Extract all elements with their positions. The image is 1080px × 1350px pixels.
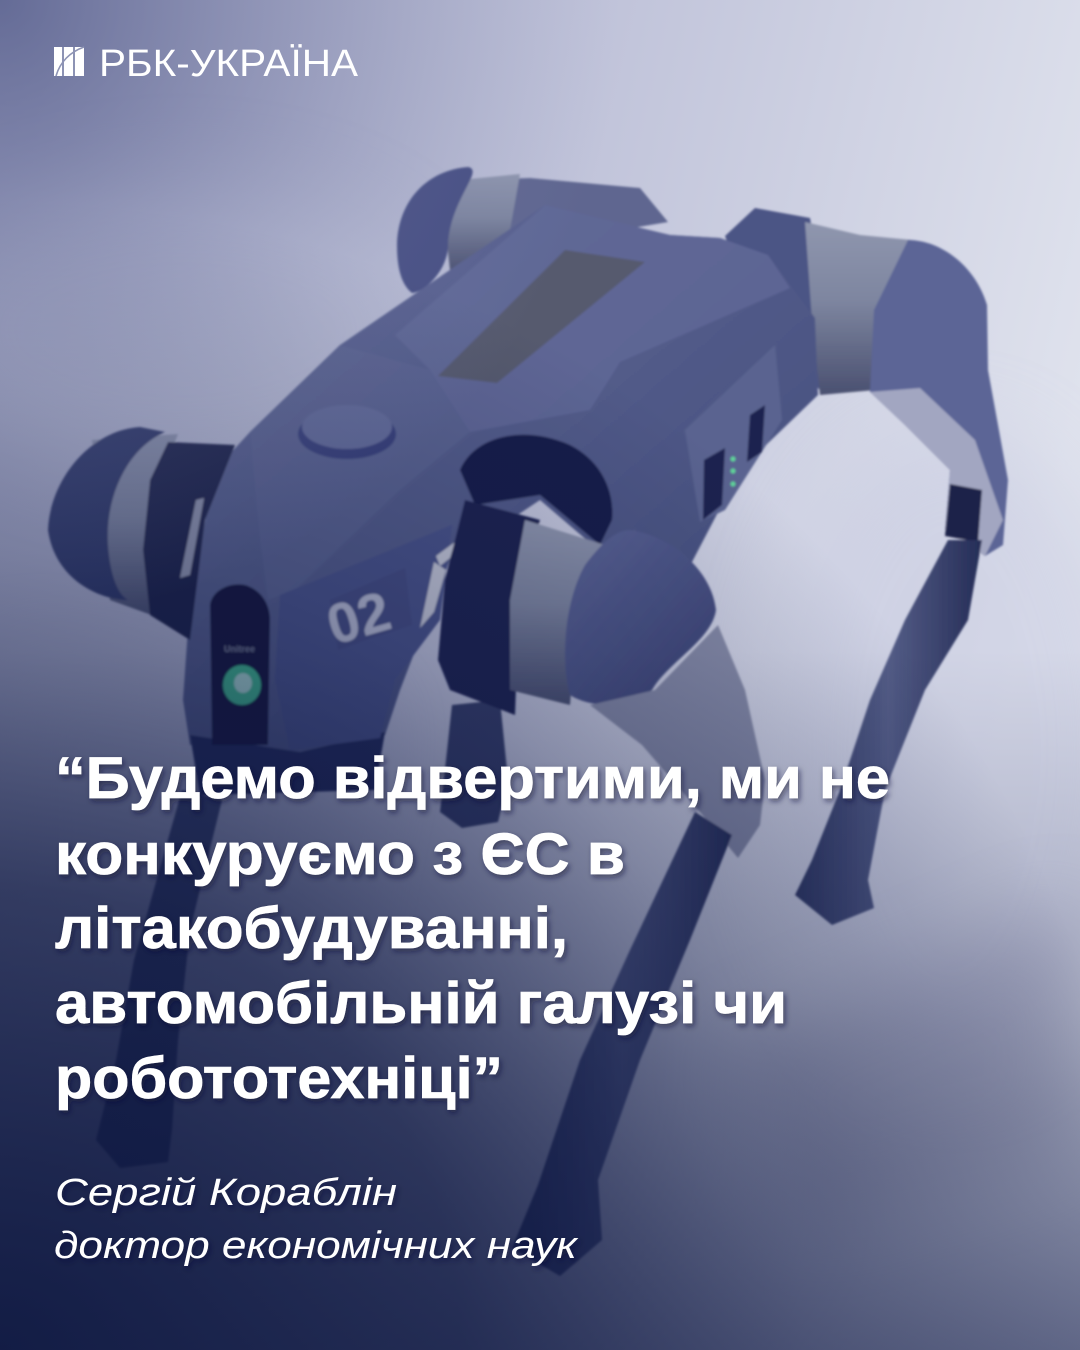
robot: front LED strip bbox=[210, 584, 270, 745]
icon: logo mark bbox=[54, 47, 84, 76]
headline quote: автомобільній галузі чи bbox=[55, 971, 787, 1036]
robot: rear middle leg bbox=[440, 700, 508, 828]
robot: upper shell facet bbox=[395, 205, 790, 432]
robot: dark cavity bbox=[460, 435, 612, 545]
headline quote: конкуруємо з ЄС в bbox=[55, 822, 625, 887]
robot: front face lower edge bbox=[190, 732, 385, 795]
logo wordmark: РБК-УКРАЇНА bbox=[99, 43, 359, 85]
headline quote: “Будемо відвертими, ми не bbox=[55, 746, 890, 811]
logo: РБК-Україна bbox=[54, 43, 359, 85]
robot: top strip bbox=[438, 250, 645, 383]
author name: Сергій Кораблін bbox=[55, 1172, 397, 1214]
robot: side face facet bbox=[250, 345, 470, 600]
robot: front-right hip bbox=[438, 500, 716, 715]
robot: number plate: 02 bbox=[320, 579, 397, 657]
robot: front LED strip: Unitree bbox=[224, 644, 255, 654]
headline quote: літакобудуванні, bbox=[55, 896, 568, 961]
robot: rear-left shoulder bbox=[397, 167, 668, 293]
robot: number plate bbox=[275, 525, 455, 750]
robot: main body shell bbox=[183, 205, 818, 752]
robot dog illustration bbox=[48, 167, 1008, 1276]
robot: front-left lower leg bbox=[96, 790, 222, 1168]
robot: front-left hip bbox=[48, 427, 235, 640]
headline quote bbox=[55, 746, 890, 1111]
robot: round button bbox=[298, 405, 396, 459]
headline quote: робототехніці” bbox=[55, 1046, 503, 1111]
robot: front-right thigh bbox=[590, 625, 765, 858]
robot: front-right lower leg bbox=[512, 812, 732, 1276]
author title: доктор економічних наук bbox=[54, 1225, 579, 1267]
robot: rear-right leg bbox=[725, 208, 1008, 925]
robot: side panel bbox=[685, 345, 782, 522]
